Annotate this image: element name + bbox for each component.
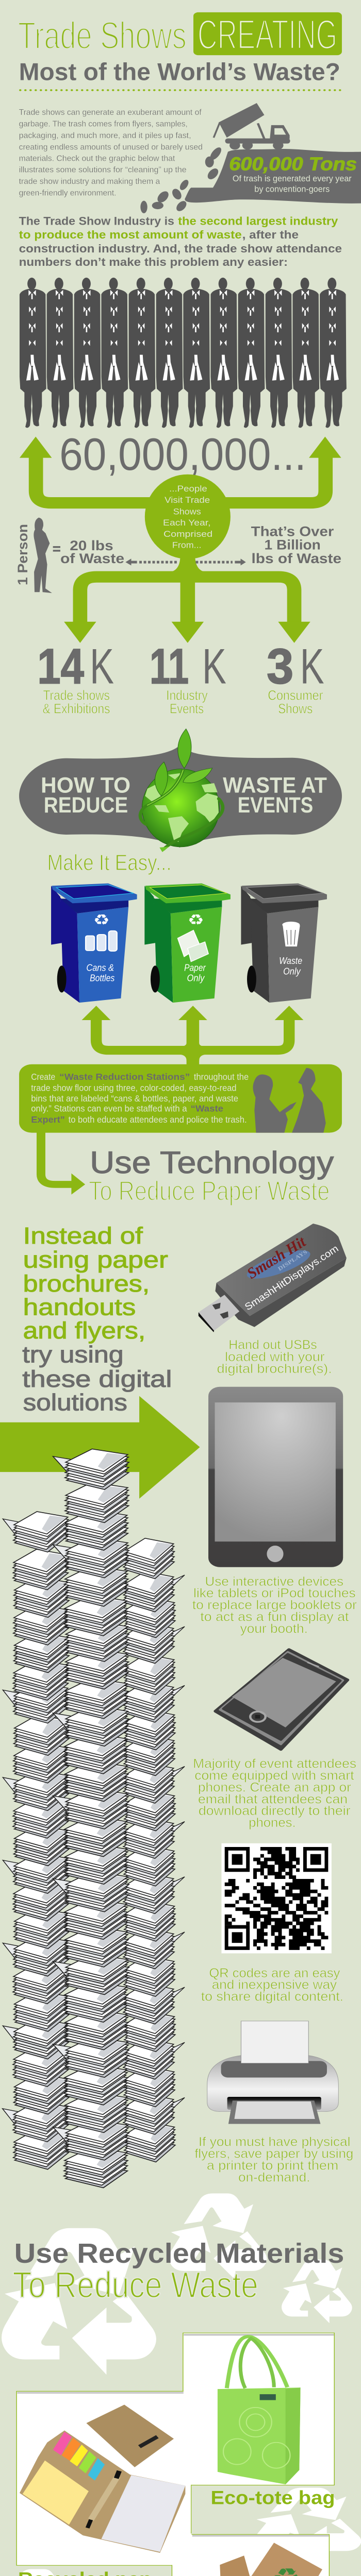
- panel: waste reduction stations: to both educate attendees and police the trash.: [69, 1115, 247, 1125]
- dotted arrow right: [195, 558, 246, 565]
- text: interactive devices: [192, 1574, 357, 1636]
- statement: second largest industry: to produce the most amount of waste: [19, 229, 242, 241]
- panel: waste reduction stations: bins that are labeled “cans & bottles, paper, and waste: [31, 1094, 238, 1104]
- section: attendance: [20, 278, 347, 643]
- intro paragraph: [19, 108, 203, 197]
- stat: 14K trade shows: K: [90, 639, 114, 694]
- intro paragraph: green-friendly environment.: [19, 189, 116, 197]
- flow arrows from bubble: [20, 436, 341, 643]
- stat: over 1 billion lbs of waste: That’s Over: [251, 524, 334, 539]
- banner: how to reduce waste at events: REDUCE: [44, 793, 128, 818]
- icon: two people talking: [253, 1068, 326, 1133]
- heading: use recycled materials: [13, 2238, 344, 2306]
- intro paragraph: packaging, and much more, and it piles up fast,: [19, 131, 191, 140]
- stat: 14K trade shows: 14: [37, 639, 84, 694]
- bin: paper only: Paper: [184, 962, 206, 973]
- stat: 3K consumer shows: 3: [267, 639, 293, 694]
- heading: use technology: Use Technology: [90, 1146, 334, 1180]
- statement: instead of using paper: Instead of: [23, 1222, 143, 1249]
- stat: 14K trade shows: & Exhibitions: [43, 701, 110, 716]
- text: physical flyers: [194, 2134, 353, 2184]
- stat: 14K trade shows: Trade shows: [43, 688, 110, 703]
- bin: cans and bottles: Bottles: [90, 973, 115, 984]
- big green arrow: [0, 1396, 200, 1499]
- USB drive logo text: SmashHitDisplays.com: [243, 1243, 340, 1313]
- trash heap with stat: [140, 146, 361, 213]
- row of business people icons: [20, 278, 347, 428]
- QR code: [221, 1843, 332, 1953]
- bubble: people visit trade shows: Shows: [173, 507, 201, 517]
- stat: 14K trade shows: [37, 639, 114, 716]
- panel: waste reduction stations: [19, 1064, 342, 1133]
- text: hand out USBs: loaded with your: [225, 1349, 324, 1364]
- USB drive logo text: DISPLAYS: [277, 1249, 308, 1273]
- statement: instead of using paper: brochures,: [23, 1270, 150, 1297]
- photo: green tote bag: [218, 2336, 301, 2484]
- section: use technology: [0, 1131, 347, 1567]
- bubble: people visit trade shows: Visit Trade: [165, 496, 210, 505]
- bubble: people visit trade shows: From...: [172, 540, 202, 550]
- stat: 11K industry events: [150, 639, 226, 716]
- banner: how to reduce waste at events: [19, 747, 342, 848]
- statement: instead of using paper: try using: [22, 1341, 124, 1367]
- stat: 3K consumer shows: Shows: [278, 701, 313, 716]
- stat: 3K consumer shows: K: [300, 639, 324, 694]
- bin: paper only: [144, 884, 231, 1003]
- icon: dump truck: [214, 103, 290, 149]
- text: smart phones: [193, 1756, 356, 1829]
- stat: 11K industry events: K: [202, 639, 226, 694]
- icon: smartphone: [215, 1650, 348, 1750]
- bin: waste only: Only: [283, 967, 301, 977]
- statement: second largest industry: numbers don’t make this problem any easier:: [19, 257, 288, 268]
- bin: cans and bottles: Cans &: [86, 962, 114, 973]
- equals: 20 lbs of waste: [53, 538, 124, 566]
- statement: second largest industry: [19, 215, 342, 268]
- statement: instead of using paper: these digital: [22, 1365, 172, 1392]
- section: digital solutions: [3, 1449, 357, 2188]
- section: printer and recycled materials: [0, 2021, 361, 2576]
- intro paragraph: creating endless amounts of unused or barely used: [19, 142, 203, 151]
- title line: Trade Shows: Trade Shows: [18, 14, 187, 57]
- text: interactive devices: your booth.: [240, 1621, 308, 1636]
- bubble: people visit trade shows: ...People: [169, 484, 207, 494]
- USB drive logo text: Smash Hit: [244, 1233, 309, 1282]
- stat: over 1 billion lbs of waste: 1 Billion: [265, 537, 321, 553]
- equals: 20 lbs of waste: 20 lbs: [70, 538, 113, 553]
- statement: second largest industry: The Trade Show Industry is: [19, 215, 174, 228]
- stat: 11K industry events: 11: [150, 639, 189, 694]
- icon: printer: [207, 2021, 338, 2124]
- text: physical flyers: on-demand.: [238, 2170, 310, 2184]
- banner: how to reduce waste at events: WASTE AT: [223, 773, 327, 798]
- panel: waste reduction stations: only.” Stations can even be staffed with a: [31, 1104, 187, 1114]
- dotted arrow left: [125, 558, 178, 565]
- statement: second largest industry: the second largest industry: [178, 215, 338, 228]
- recycling symbols background: [0, 2193, 361, 2576]
- text: hand out USBs: Hand out USBs: [228, 1337, 317, 1352]
- photo: recycled cardboard boxes: [176, 2543, 322, 2576]
- icon: USB drive: [199, 1224, 347, 1332]
- bubble: people visit trade shows: Each Year,: [163, 518, 210, 528]
- statement: instead of using paper: [22, 1222, 172, 1415]
- panel: waste reduction stations: trade show floor using three, color-coded, easy-to-read: [31, 1083, 236, 1093]
- statement: instead of using paper: using paper: [23, 1246, 168, 1273]
- text: smart phones: phones.: [249, 1815, 296, 1829]
- stat: over 1 billion lbs of waste: lbs of Waste: [252, 551, 341, 566]
- label: 1 person: 1 Person: [15, 524, 30, 585]
- icon: green globe with leaves: [140, 729, 223, 852]
- banner: how to reduce waste at events: HOW TO: [41, 773, 130, 798]
- panel: waste reduction stations: Create: [31, 1072, 55, 1082]
- bubble: people visit trade shows: Comprised: [163, 530, 212, 539]
- intro paragraph: Trade shows can generate an exuberant amount of: [19, 108, 202, 117]
- stat: 11K industry events: Events: [170, 701, 204, 716]
- text: QR codes: and inexpensive way: [212, 1977, 337, 1992]
- intro paragraph: trade show industry and making them a: [19, 177, 160, 186]
- bin: waste only: Waste: [279, 956, 302, 966]
- stat: 3K consumer shows: Consumer: [268, 688, 323, 703]
- intro paragraph: garbage. The trash comes from flyers, samples,: [19, 119, 188, 128]
- equals: 20 lbs of waste: of Waste: [60, 551, 124, 566]
- banner: how to reduce waste at events: EVENTS: [238, 793, 313, 818]
- illustration: tall paper stacks: [3, 1449, 185, 2188]
- section: event counts and reduce banner: [19, 639, 342, 875]
- panel: waste reduction stations: throughout the: [194, 1072, 249, 1082]
- intro paragraph: materials. Check out the graphic below that: [19, 154, 175, 163]
- bin: waste only: [241, 884, 327, 1003]
- panel: waste reduction stations: “Waste: [191, 1104, 223, 1114]
- photo: recycled pen and pad: [20, 2404, 185, 2553]
- panel backgrounds: [17, 2333, 337, 2576]
- text: physical flyers: a printer to print them: [207, 2158, 338, 2173]
- section: waste reduction stations: [19, 884, 342, 1133]
- trash heap with stat: by convention-goers: [254, 184, 330, 194]
- intro paragraph: illustrates some solutions for “cleaning” up the: [19, 165, 187, 174]
- statement: instead of using paper: and flyers,: [23, 1317, 145, 1344]
- statement: instead of using paper: solutions: [23, 1389, 127, 1415]
- heading: use technology: [89, 1146, 334, 1206]
- statement: second largest industry: , after the: [242, 229, 299, 241]
- bin: paper only: ♻: [188, 911, 204, 928]
- statement: instead of using paper: handouts: [23, 1294, 136, 1320]
- section: recycled products: [17, 2333, 350, 2576]
- panel: waste reduction stations: “Waste Reduction Stations”: [59, 1072, 190, 1082]
- bin: cans and bottles: [51, 884, 137, 1003]
- text: QR codes: [201, 1965, 343, 2004]
- panel: waste reduction stations: Expert”: [31, 1115, 65, 1125]
- elbow arrow: [41, 1131, 85, 1195]
- stat: over 1 billion lbs of waste: [251, 524, 341, 566]
- stat: 3K consumer shows: [267, 639, 324, 716]
- icon: woman silhouette: [34, 518, 52, 593]
- text: hand out USBs: [217, 1337, 332, 1376]
- bin: cans and bottles: ♻: [93, 911, 110, 928]
- heading: make it easy: Make It Easy...: [47, 850, 172, 875]
- text: hand out USBs: digital brochure(s).: [217, 1361, 332, 1376]
- label: eco-tote bag: Eco-tote bag: [210, 2487, 335, 2508]
- section: title and intro: [18, 12, 361, 268]
- stat: 11K industry events: Industry: [166, 688, 208, 703]
- bubble: people visit trade shows: [145, 474, 231, 559]
- section: phones, QR and printer: [193, 1756, 356, 2004]
- bin: paper only: Only: [187, 973, 205, 984]
- arrows to bins: [81, 1006, 303, 1065]
- icon: tablet: [208, 1387, 343, 1567]
